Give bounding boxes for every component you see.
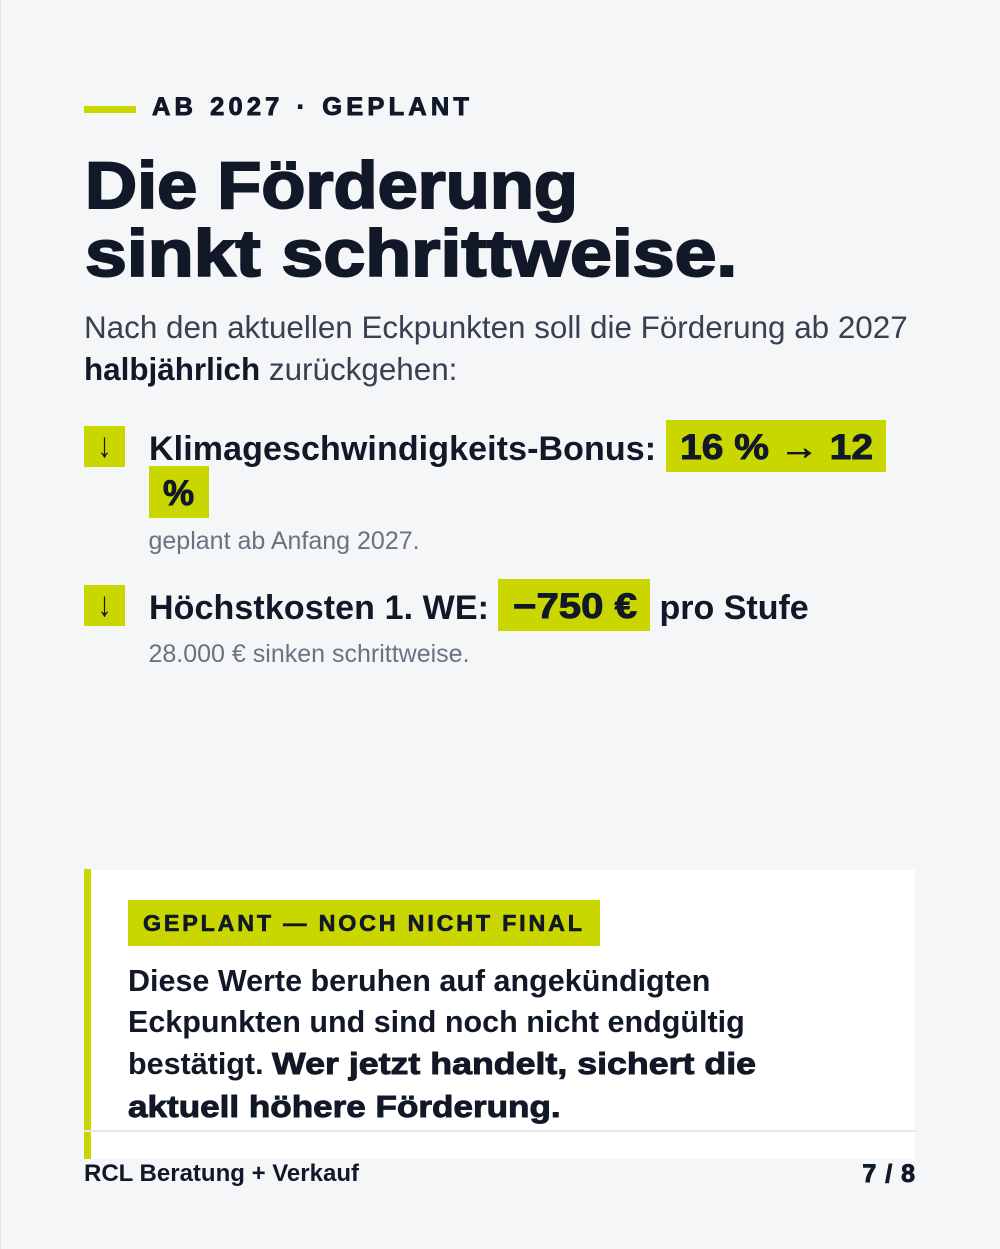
callout text: aktuell höhere Förderung.: [128, 1090, 561, 1124]
icon: down arrow: ↓: [98, 426, 112, 465]
left page edge: [0, 0, 1, 1249]
icon: down arrow: [84, 426, 125, 467]
title: Die Förderung: [85, 148, 578, 222]
title: [85, 148, 737, 290]
highlight: 16 % to 12: 16 % → 12: [680, 428, 873, 467]
highlight: minus 750 euro: −750 €: [513, 587, 637, 626]
callout text: Eckpunkten und sind noch nicht endgültig: [128, 1005, 745, 1039]
highlight: minus 750 euro: [498, 579, 650, 631]
callout accent bar: [84, 869, 91, 1159]
icon: down arrow: [84, 585, 125, 626]
icon: down arrow: ↓: [98, 585, 112, 624]
eyebrow label: AB 2027 · GEPLANT: [152, 93, 473, 121]
item: Klimageschwindigkeits-Bonus: [84, 420, 886, 554]
callout tag: GEPLANT — NOCH NICHT FINAL: [143, 910, 585, 936]
callout text: [128, 964, 756, 1124]
callout panel: [84, 870, 915, 1159]
item heading: Klimageschwindigkeits-Bonus:: [149, 430, 656, 468]
item note: geplant ab Anfang 2027.: [148, 526, 420, 554]
footer brand: RCL Beratung + Verkauf: [84, 1160, 359, 1187]
intro text: halbjährlich zurückgehen:: [84, 352, 457, 387]
highlight: percent sign: [149, 466, 209, 518]
item suffix: pro Stufe: [660, 588, 809, 626]
highlight: percent sign: %: [163, 474, 194, 513]
footer rule: [84, 1130, 916, 1132]
eyebrow accent bar: [84, 106, 136, 113]
eyebrow: [84, 93, 473, 121]
highlight: 16 % to 12: [666, 420, 886, 472]
intro text: [84, 310, 908, 387]
callout text: Wer jetzt handelt, sichert die: [272, 1047, 756, 1081]
item note: 28.000 € sinken schrittweise.: [148, 640, 470, 668]
title: sinkt schrittweise.: [85, 216, 737, 290]
item: Höchstkosten: [84, 579, 809, 668]
footer: [84, 1130, 916, 1188]
callout text: Diese Werte beruhen auf angekündigten: [128, 964, 710, 998]
intro text: Nach den aktuellen Eckpunkten soll die Förderung ab 2027: [84, 310, 908, 345]
callout tag: [128, 900, 600, 946]
callout text: bestätigt.: [128, 1047, 264, 1081]
page number: 7 / 8: [862, 1160, 916, 1188]
item heading: Höchstkosten 1. WE:: [149, 588, 489, 626]
